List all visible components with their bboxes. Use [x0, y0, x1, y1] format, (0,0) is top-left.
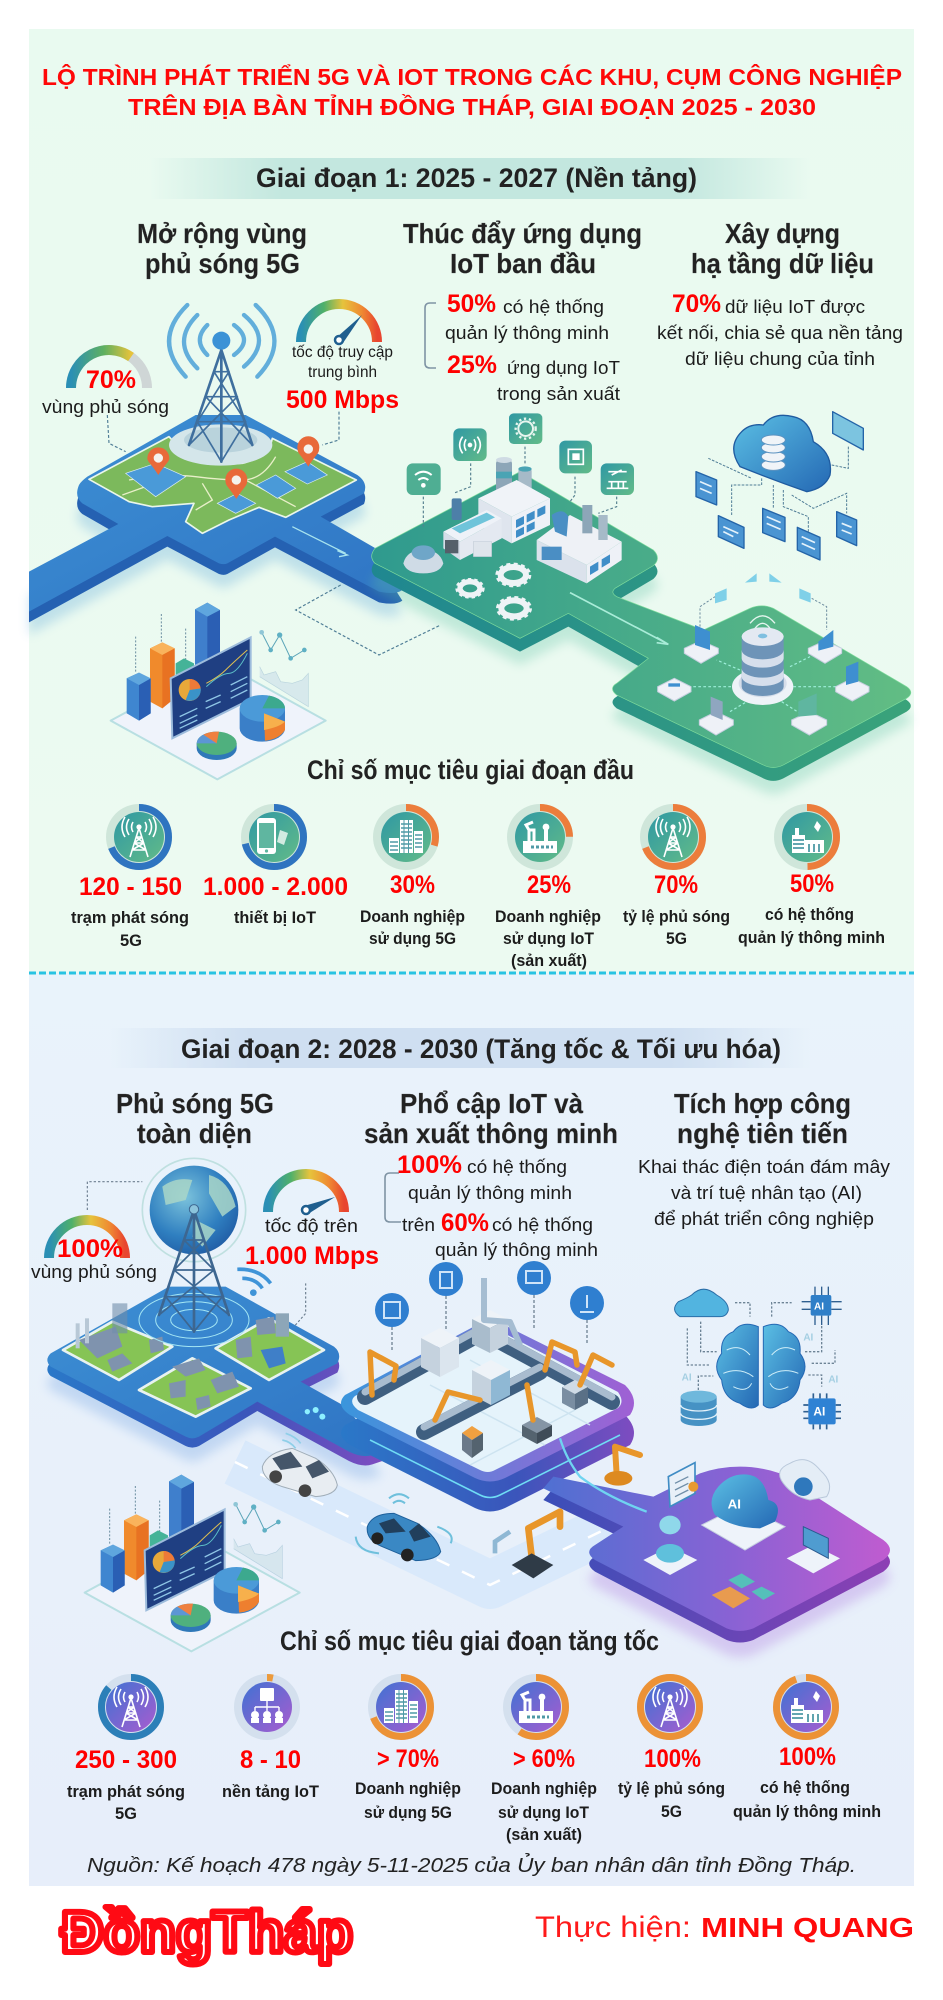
- text block: IoT targets stage 2: trên: [402, 1214, 435, 1235]
- KPI icon: smart management: [774, 804, 840, 870]
- KPI: 50%: [738, 870, 885, 947]
- document: [668, 1463, 698, 1507]
- text block: IoT targets stage 2: 100%: [397, 1151, 462, 1179]
- title: [42, 63, 902, 120]
- KPI: 70%: 70%: [654, 871, 698, 899]
- heading: stage 1 KPIs: Chỉ số mục tiêu giai đoạn đầu: [307, 755, 634, 785]
- illustration: green factory and database platforms: [372, 412, 911, 794]
- KPI: 50%: có hệ thống: [765, 906, 854, 924]
- KPI: over 70%: sử dụng 5G: [364, 1804, 452, 1822]
- KPI: 100% smart management: 100%: [779, 1743, 836, 1771]
- KPI: 50%: 50%: [790, 870, 834, 898]
- heading: IoT and smart manufacturing: sản xuất thông minh: [364, 1118, 618, 1149]
- KPI: 8-10 platforms: 8 - 10: [240, 1746, 301, 1774]
- KPI: 100% coverage: 100%: [644, 1745, 701, 1773]
- robot arms: [370, 1342, 612, 1420]
- gauge: 70% coverage: [42, 350, 169, 417]
- gauge: 70% coverage: vùng phủ sóng: [42, 396, 169, 417]
- gauge: 70% coverage: 70%: [86, 366, 136, 394]
- gauge: 100% coverage: [31, 1220, 157, 1282]
- KPI: over 60%: [491, 1745, 597, 1844]
- KPI: 25%: Doanh nghiệp: [495, 908, 601, 926]
- text block: IoT targets stage 2: có hệ thống: [492, 1214, 593, 1235]
- illustration: white connected car: [262, 1433, 337, 1497]
- KPI: 30%: [360, 871, 465, 948]
- KPI: 25%: [495, 871, 601, 970]
- gauge: average speed 500 Mbps: [286, 304, 399, 414]
- panel: stage 2 background: [29, 973, 914, 1886]
- lattice tower: [159, 1210, 229, 1332]
- text block: data targets stage 1: dữ liệu chung của tỉnh: [685, 348, 875, 369]
- gauge: 100% coverage: vùng phủ sóng: [31, 1261, 157, 1282]
- chart illustration: stage 2 dashboard: [85, 1475, 300, 1651]
- AI server pedestals: [643, 1516, 840, 1608]
- conveyors: [365, 1320, 612, 1432]
- illustration: pale vehicle road: [235, 1462, 610, 1585]
- text block: IoT targets stage 1: 25%: [447, 351, 497, 379]
- gauge: speed above 1000 Mbps: [245, 1174, 379, 1270]
- KPI: 100% smart management: [733, 1743, 881, 1821]
- KPI: 8-10 platforms: nền tảng IoT: [222, 1783, 319, 1801]
- KPI: 1000-2000 devices: 1.000 - 2.000: [203, 873, 348, 901]
- KPI: over 60%: > 60%: [513, 1745, 575, 1773]
- brain: [717, 1324, 805, 1408]
- gauge: average speed 500 Mbps: trung bình: [308, 364, 377, 381]
- heading: promote IoT: Thúc đẩy ứng dụng: [403, 218, 642, 249]
- illustration: globe tower on blue platform: [47, 1158, 382, 1479]
- radio tower: [189, 350, 252, 462]
- title: TRÊN ĐỊA BÀN TỈNH ĐỒNG THÁP, GIAI ĐOẠN 2025 - 2030: [128, 92, 816, 120]
- KPI: 1000-2000 devices: [203, 873, 348, 927]
- robot arm beside road: [512, 1512, 560, 1578]
- KPI icon: enterprises IoT: [507, 804, 573, 870]
- KPI: 250-300 stations: [67, 1746, 185, 1823]
- text block: IoT targets stage 1: trong sản xuất: [497, 383, 620, 404]
- illustration: smart factory platform: [341, 1261, 634, 1512]
- KPI: over 70%: [355, 1745, 461, 1822]
- data arrows: [715, 573, 811, 603]
- small AI labels: AI: [682, 1373, 692, 1384]
- white cloud with gear: [780, 1460, 830, 1500]
- machines: [421, 1310, 588, 1458]
- text block: data targets stage 1: kết nối, chia sẻ qua nền tảng: [657, 322, 903, 343]
- heading: promote IoT: IoT ban đầu: [450, 248, 596, 279]
- text block: data targets stage 1: dữ liệu IoT được: [725, 296, 865, 317]
- KPI: 120-150 stations: 5G: [120, 932, 142, 950]
- KPI: 1000-2000 devices: thiết bị IoT: [234, 909, 316, 927]
- gauge: average speed 500 Mbps: tốc độ truy cập: [292, 344, 393, 361]
- robot arm on road: [604, 1447, 640, 1486]
- credit: [535, 1911, 914, 1944]
- heading: advanced technology: [674, 1088, 851, 1149]
- KPI: 100% coverage: [618, 1745, 725, 1821]
- divider between stages: [29, 972, 914, 974]
- gauge: speed above 1000 Mbps: 1.000 Mbps: [245, 1242, 379, 1270]
- wifi symbol: [237, 1269, 271, 1288]
- heading: full 5G coverage: toàn diện: [137, 1118, 252, 1149]
- KPI icon: stations: [106, 804, 172, 870]
- heading banner: stage 2: Giai đoạn 2: 2028 - 2030 (Tăng tốc & Tối ưu hóa): [181, 1034, 781, 1064]
- gauge: 100% coverage: 100%: [57, 1235, 123, 1263]
- heading: IoT and smart manufacturing: [364, 1088, 618, 1149]
- KPI icon: smart management stage 2: [773, 1674, 839, 1740]
- KPI: 100% smart management: có hệ thống: [760, 1779, 850, 1797]
- KPI: 30%: Doanh nghiệp: [360, 908, 465, 926]
- AI chip top: AI: [814, 1301, 824, 1312]
- AI chip top: [802, 1287, 842, 1325]
- credit: MINH QUANG: [701, 1912, 914, 1943]
- heading: data infrastructure: hạ tầng dữ liệu: [691, 248, 874, 279]
- heading: data infrastructure: [691, 218, 874, 279]
- KPI: 25%: 25%: [527, 871, 571, 899]
- signal waves: [169, 305, 274, 377]
- KPI: 250-300 stations: 5G: [115, 1805, 137, 1823]
- KPI: 70%: 5G: [666, 930, 687, 948]
- KPI icon: enterprises 5G stage 2: [368, 1674, 434, 1740]
- KPI icon: IoT platforms: [234, 1674, 300, 1740]
- KPI icon: enterprises IoT stage 2: [503, 1674, 569, 1740]
- dome tank: [403, 545, 443, 573]
- device pedestals: [658, 641, 869, 735]
- heading: advanced technology: Tích hợp công: [674, 1088, 851, 1119]
- database icon: [681, 1391, 717, 1426]
- KPI icon: enterprises 5G: [373, 804, 439, 870]
- text block: cloud and AI: Khai thác điện toán đám mây: [638, 1156, 891, 1177]
- KPI: 30%: sử dụng 5G: [369, 930, 456, 948]
- text block: data targets stage 1: [657, 290, 903, 369]
- KPI: 50%: quản lý thông minh: [738, 929, 885, 947]
- heading: stage 2 KPIs: Chỉ số mục tiêu giai đoạn tăng tốc: [280, 1626, 659, 1656]
- heading: promote IoT: [403, 218, 642, 279]
- heading: expand 5G coverage: Mở rộng vùng: [137, 218, 307, 249]
- AI chip bottom: AI: [813, 1405, 825, 1419]
- KPI: 120-150 stations: 120 - 150: [79, 873, 182, 901]
- cloud database: [734, 415, 830, 492]
- factory buildings: [443, 457, 622, 583]
- heading banner: stage 1: [150, 158, 810, 199]
- KPI: 8-10 platforms: [222, 1746, 319, 1801]
- chart illustration: stage 1 dashboard: [111, 603, 326, 779]
- text block: cloud and AI: và trí tuệ nhân tạo (AI): [671, 1182, 862, 1203]
- globe: [142, 1158, 246, 1262]
- KPI: over 60%: (sản xuất): [506, 1826, 582, 1844]
- KPI: 70%: tỷ lệ phủ sóng: [623, 908, 730, 926]
- text block: IoT targets stage 1: có hệ thống: [503, 296, 604, 317]
- gears: [457, 564, 531, 619]
- panel: stage 1 background: [29, 29, 914, 973]
- text block: data targets stage 1: 70%: [672, 290, 721, 318]
- KPI: 70%: [623, 871, 730, 948]
- KPI: 25%: (sản xuất): [511, 952, 587, 970]
- AI cloud server: AI: [728, 1496, 741, 1511]
- text block: IoT targets stage 2: có hệ thống: [467, 1156, 567, 1177]
- KPI: over 70%: > 70%: [377, 1745, 439, 1773]
- heading: full 5G coverage: [116, 1088, 274, 1149]
- heading: data infrastructure: Xây dựng: [725, 218, 840, 249]
- KPI: over 60%: sử dụng IoT: [498, 1804, 589, 1822]
- source note: Nguồn: Kế hoạch 478 ngày 5-11-2025 của Ủy ban nhân dân tỉnh Đồng Tháp.: [87, 1853, 856, 1877]
- small AI labels: AI: [803, 1333, 814, 1344]
- KPI icon: coverage stage 2: [637, 1674, 703, 1740]
- heading banner: stage 2: [110, 1028, 810, 1068]
- KPI: 100% smart management: quản lý thông minh: [733, 1803, 881, 1821]
- gauge: speed above 1000 Mbps: tốc độ trên: [265, 1215, 358, 1236]
- pin markers: [147, 436, 319, 499]
- KPI icon: stations stage 2: [98, 1674, 164, 1740]
- AI chip bottom: [803, 1393, 841, 1429]
- illustration: purple AI platform and road: [495, 1287, 890, 1657]
- text block: IoT targets stage 1: ứng dụng IoT: [507, 357, 620, 378]
- KPI: 25%: sử dụng IoT: [503, 930, 594, 948]
- KPI: 250-300 stations: 250 - 300: [75, 1746, 177, 1774]
- IoT icon tiles: [407, 413, 634, 495]
- credit: Thực hiện:: [535, 1911, 691, 1944]
- logo: Đồng Tháp: ĐồngTháp: [61, 1900, 353, 1965]
- heading: full 5G coverage: Phủ sóng 5G: [116, 1088, 274, 1119]
- text block: IoT targets stage 2: [385, 1151, 598, 1260]
- small AI labels: AI: [828, 1374, 839, 1385]
- cloud icon: [675, 1289, 728, 1317]
- text block: IoT targets stage 2: quản lý thông minh: [435, 1239, 598, 1260]
- heading: advanced technology: nghệ tiên tiến: [677, 1118, 848, 1149]
- KPI icon: coverage: [640, 804, 706, 870]
- KPI: 100% coverage: tỷ lệ phủ sóng: [618, 1780, 725, 1798]
- title: LỘ TRÌNH PHÁT TRIỂN 5G VÀ IOT TRONG CÁC KHU, CỤM CÔNG NGHIỆP: [42, 63, 902, 90]
- text block: cloud and AI: [638, 1156, 891, 1229]
- illustration: 5G tower on blue platform with road: [29, 305, 441, 655]
- heading banner: stage 1: Giai đoạn 1: 2025 - 2027 (Nền tảng): [256, 163, 697, 193]
- text block: cloud and AI: để phát triển công nghiệp: [654, 1208, 874, 1229]
- KPI: 30%: 30%: [390, 871, 435, 899]
- text block: IoT targets stage 2: quản lý thông minh: [408, 1182, 572, 1203]
- KPI: over 60%: Doanh nghiệp: [491, 1780, 597, 1798]
- text block: IoT targets stage 1: quản lý thông minh: [445, 322, 609, 343]
- KPI: over 70%: Doanh nghiệp: [355, 1780, 461, 1798]
- AI cloud server: [702, 1474, 785, 1550]
- ground plots: [63, 1318, 324, 1417]
- text block: IoT targets stage 1: [425, 290, 620, 404]
- heading: expand 5G coverage: phủ sóng 5G: [145, 248, 300, 279]
- data tiles: [696, 412, 863, 560]
- KPI: 100% coverage: 5G: [661, 1803, 682, 1821]
- factory IoT circles: [375, 1261, 604, 1327]
- KPI: 120-150 stations: trạm phát sóng: [71, 909, 189, 927]
- database stack: [732, 627, 793, 705]
- text block: IoT targets stage 2: 60%: [441, 1209, 489, 1237]
- heading: expand 5G coverage: [137, 218, 307, 279]
- KPI icon: IoT devices: [241, 804, 307, 870]
- illustration: blue connected car: [356, 1494, 452, 1561]
- heading: IoT and smart manufacturing: Phổ cập IoT và: [400, 1088, 583, 1119]
- gauge: average speed 500 Mbps: 500 Mbps: [286, 386, 399, 414]
- KPI: 250-300 stations: trạm phát sóng: [67, 1783, 185, 1801]
- text block: IoT targets stage 1: 50%: [447, 290, 496, 318]
- small AI labels: [682, 1333, 839, 1385]
- KPI: 120-150 stations: [71, 873, 189, 950]
